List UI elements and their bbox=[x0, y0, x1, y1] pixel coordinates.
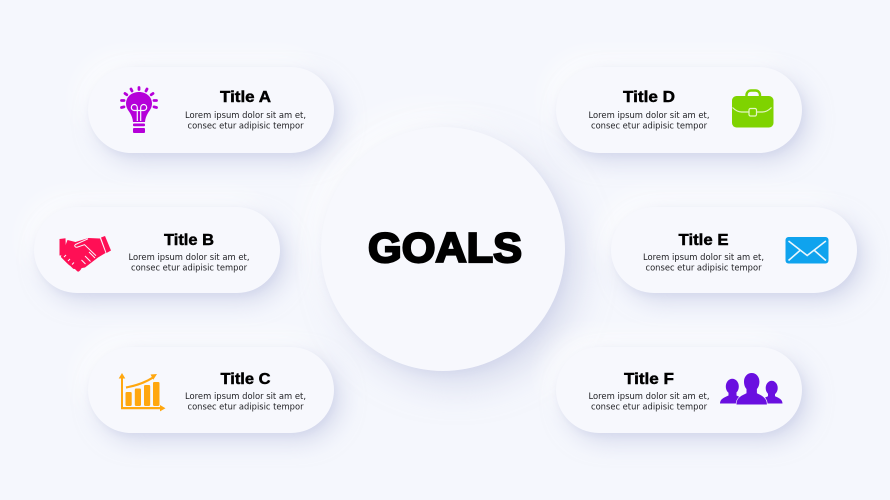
text: Title E description: consec etur adipisic tempor bbox=[646, 262, 762, 274]
title: Title C: Title C bbox=[220, 371, 271, 388]
text: Title F description: consec etur adipisic tempor bbox=[591, 402, 707, 412]
text: Title C description: Lorem ipsum dolor sit am et, bbox=[185, 391, 306, 402]
heading: GOALS: GOALS bbox=[368, 224, 522, 271]
title: Title A: Title A bbox=[220, 89, 271, 106]
text: Title C description: consec etur adipisic tempor bbox=[188, 402, 304, 412]
text: Title B description: Lorem ipsum dolor sit am et, bbox=[128, 252, 250, 263]
icon: handshake bbox=[60, 236, 111, 272]
panel: central goals circle bbox=[321, 127, 565, 371]
text: Title F description: Lorem ipsum dolor sit am et, bbox=[588, 391, 710, 402]
text: Title B description bbox=[128, 252, 250, 274]
text: Title A description: Lorem ipsum dolor sit am et, bbox=[185, 110, 306, 121]
text: Title D description: consec etur adipisic tempor bbox=[591, 120, 707, 132]
title: Title F: Title F bbox=[624, 371, 674, 388]
text: Title A description bbox=[185, 110, 306, 132]
icon: envelope bbox=[786, 237, 828, 264]
text: Title E description: Lorem ipsum dolor sit am et, bbox=[643, 252, 764, 263]
title: Title E: Title E bbox=[678, 232, 729, 249]
text: Title A description: consec etur adipisic tempor bbox=[188, 120, 304, 132]
icon: light bulb bbox=[122, 88, 156, 133]
panel: Title D bbox=[556, 67, 802, 153]
icon: growth chart bbox=[119, 373, 166, 411]
icon: briefcase bbox=[732, 90, 774, 128]
text: Title F description bbox=[588, 391, 710, 412]
text: Title B description: consec etur adipisic tempor bbox=[131, 262, 247, 274]
panel: Title B bbox=[34, 207, 280, 293]
text: Title C description bbox=[185, 391, 306, 412]
text: Title D description bbox=[588, 110, 710, 132]
panel: Title E bbox=[611, 207, 857, 293]
text: Title E description bbox=[643, 252, 764, 274]
panel: Title C bbox=[88, 347, 334, 433]
title: Title D: Title D bbox=[623, 89, 675, 106]
icon: group of people bbox=[720, 373, 782, 404]
text: Title D description: Lorem ipsum dolor sit am et, bbox=[588, 110, 710, 121]
panel: Title A bbox=[88, 67, 334, 153]
title: Title B: Title B bbox=[164, 232, 214, 249]
panel: Title F bbox=[556, 347, 802, 433]
